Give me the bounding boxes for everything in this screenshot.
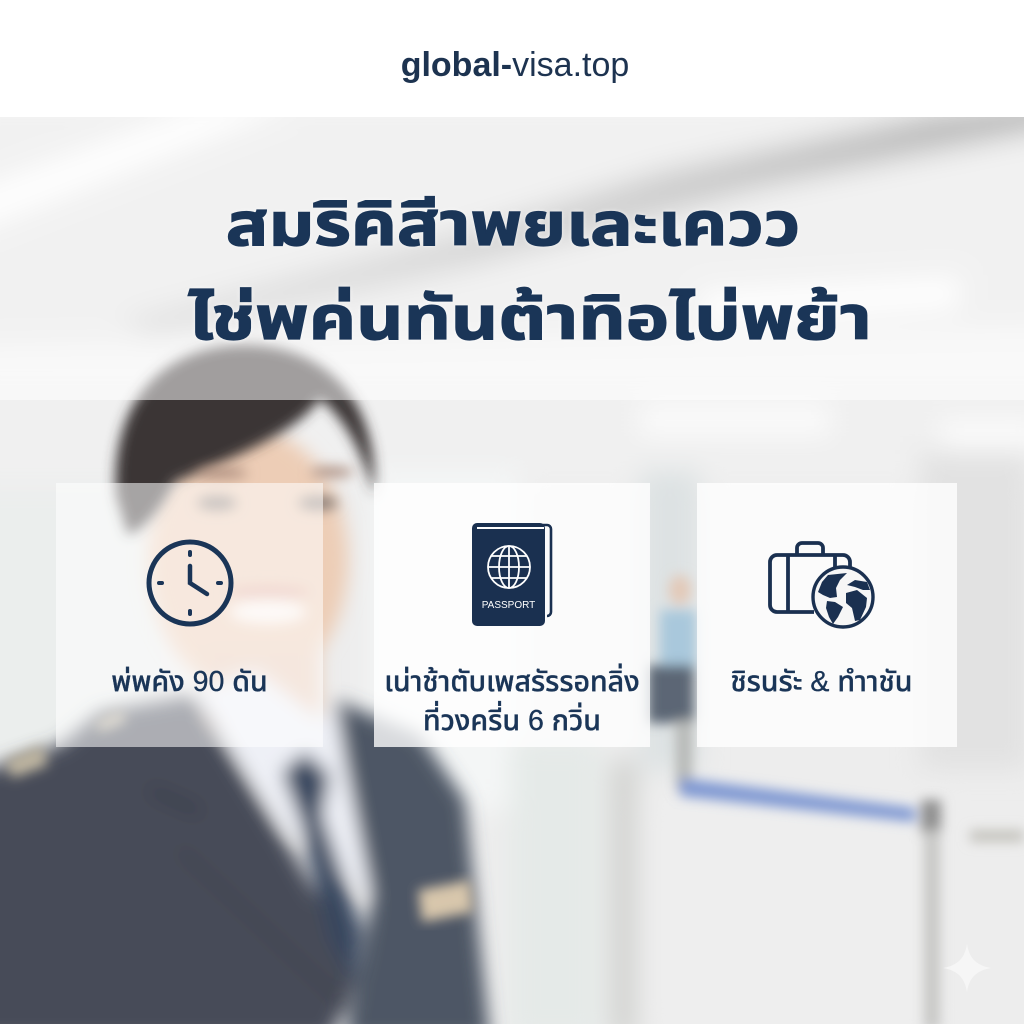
- name badge: [418, 880, 473, 922]
- icon: passport: PASSPORT: [482, 600, 535, 611]
- title line 1: สมริคิสีาพยเละเควว: [226, 190, 800, 258]
- label: travel and work: ชิรนรัะ & ทำาชัน: [731, 666, 912, 698]
- eyebrows, eyes and smile: [196, 468, 248, 478]
- distant traveller: [669, 575, 691, 605]
- header bar: [0, 0, 1024, 117]
- icon: sparkle watermark: [944, 946, 988, 990]
- site name: global-visa.top: [401, 46, 629, 84]
- label: passport validity: ที่วงครี่น 6 กวิ่น: [423, 705, 601, 737]
- label: passport validity: [384, 663, 640, 737]
- label: 90 days: พ่พคัง 90 ดัน: [111, 666, 268, 698]
- hair: [116, 345, 374, 535]
- icon: clock: [146, 540, 234, 626]
- face and neck: [148, 428, 348, 692]
- jacket: [0, 695, 355, 1024]
- epaulettes: [5, 745, 48, 778]
- panel: travel and work: [697, 483, 957, 747]
- queue barrier: [680, 778, 915, 822]
- icon: passport: [472, 523, 552, 626]
- panel: 90 days: [56, 483, 323, 747]
- label: passport validity: เน่าช้าตับเพสรัรรอทลิ่ง: [384, 666, 640, 698]
- icon: suitcase with globe: [768, 541, 875, 629]
- lapel shadow lines: [150, 790, 200, 812]
- tie: [282, 752, 362, 985]
- upper frosted band: [0, 117, 1024, 400]
- shirt: [195, 670, 372, 900]
- title line 2: ไช่พค่นทันต้าทิอไบ่พย้า: [188, 284, 872, 352]
- panel: passport: [374, 483, 650, 747]
